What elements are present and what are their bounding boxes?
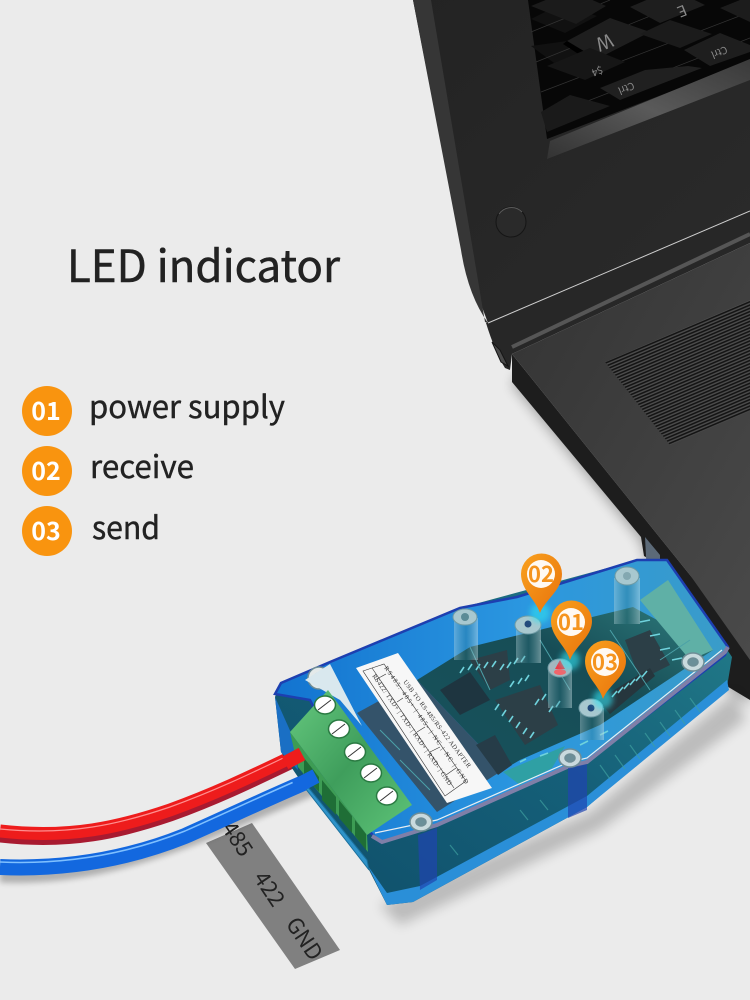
legend item 01 — [22, 382, 285, 436]
usb adapter device — [275, 560, 745, 925]
legend item 01: power supply — [89, 382, 285, 427]
laptop base — [512, 243, 750, 660]
grey terminal label — [206, 814, 340, 969]
blue wire — [0, 774, 315, 867]
key legends — [589, 0, 730, 99]
legend item 02: receive — [90, 442, 194, 487]
legend item 03: 03 — [31, 512, 61, 548]
grey terminal label: 485 — [215, 814, 262, 862]
legend — [22, 382, 285, 556]
key legends: E — [674, 0, 690, 22]
chips — [470, 650, 510, 690]
laptop side wall — [512, 354, 750, 700]
legend item 02: 02 — [31, 452, 61, 488]
key legends: $4 — [589, 63, 606, 81]
key legends: Ctrl — [616, 79, 637, 99]
wire ends in terminal — [285, 754, 316, 787]
standoffs — [453, 567, 640, 740]
vent grille — [605, 300, 750, 445]
wires — [0, 750, 320, 875]
lid rim highlight — [372, 647, 728, 842]
screws — [308, 653, 704, 831]
white label — [356, 653, 492, 803]
screen bezel — [547, 59, 750, 159]
key legends: W — [592, 27, 618, 59]
keyboard — [528, 0, 750, 139]
hinge button — [496, 207, 526, 237]
terminal block — [290, 690, 412, 852]
white mount behind terminal — [305, 664, 362, 726]
legend item 03: send — [92, 503, 160, 548]
location pin 01 — [551, 600, 592, 670]
location pin 03: 03 — [592, 645, 618, 677]
grey terminal label: 422 — [247, 864, 294, 912]
legend item 03 — [22, 503, 160, 556]
top lid — [275, 560, 728, 842]
key legends: Ctrl — [709, 43, 730, 63]
location pin 02: 02 — [528, 557, 554, 589]
white label: USB TO RS-485/RS-422 ADAPTER — [401, 679, 472, 770]
pcb — [357, 580, 713, 812]
legend item 01: 01 — [31, 392, 61, 428]
side pcb traces — [450, 698, 700, 855]
white label: RS422: TXD+ | TXD- | RXD+ | RXD- | GND — [370, 673, 453, 787]
side posts — [418, 764, 587, 890]
grey terminal label: GND — [279, 910, 332, 966]
lower case — [275, 560, 732, 905]
laptop — [413, 0, 750, 705]
red wire — [0, 750, 300, 837]
screw holes — [314, 696, 398, 805]
legend item 02 — [22, 442, 194, 496]
location pin 03 — [585, 640, 626, 709]
location pin 02 — [521, 553, 562, 623]
white label: RS485: 485+ | 485- | NC | NC | GND — [382, 665, 470, 786]
hinge band — [486, 211, 750, 370]
location pin 01: 01 — [558, 605, 584, 637]
traces — [460, 620, 682, 762]
title: LED indicator — [67, 231, 341, 295]
